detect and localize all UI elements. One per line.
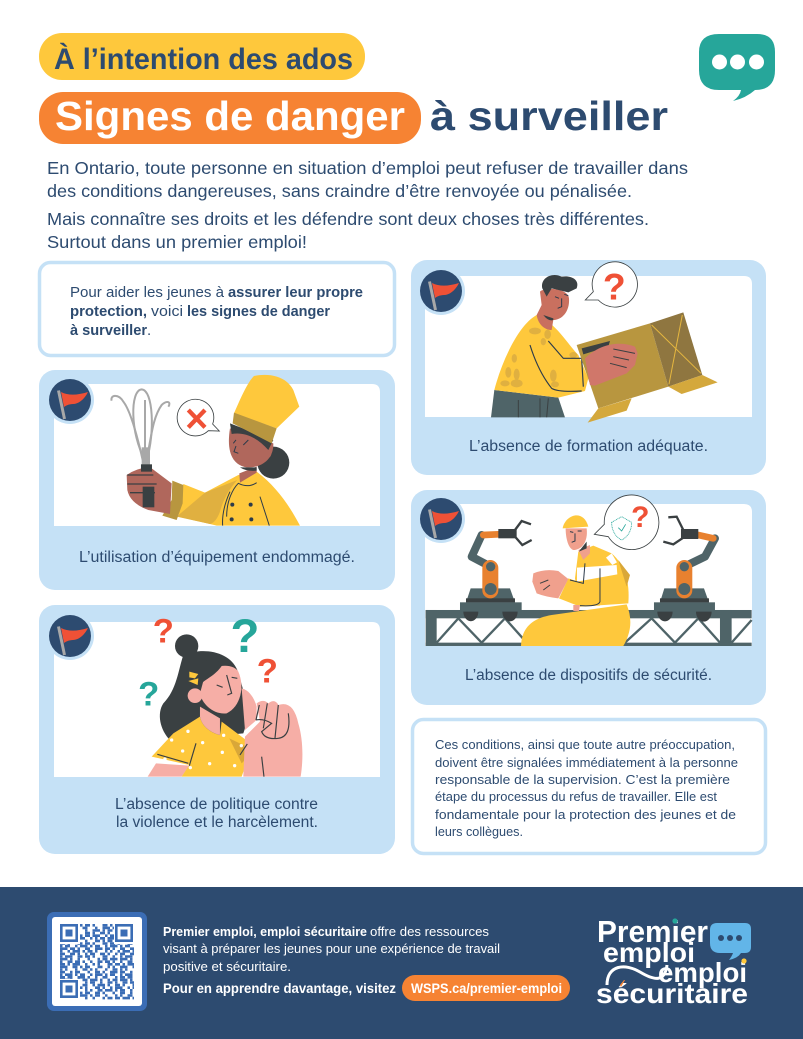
intro text: Mais connaître ses droits et les défendre sont deux choses très différentes. (47, 209, 649, 229)
illustration: girl thinking with question marks: ? (138, 675, 159, 713)
panel: no violence policy (39, 605, 395, 854)
tag heading: À l'intention des ados: À l’intention des ados (54, 42, 353, 76)
panel: reporting note: fondamentale pour la protection des jeunes et de (435, 807, 736, 822)
panel: damaged equipment (39, 370, 395, 590)
tag heading: À l'intention des ados (39, 33, 365, 80)
illustration: worker between robotic arms on a conveyor (426, 495, 752, 646)
intro text: Surtout dans un premier emploi! (47, 232, 307, 252)
logo: Premier emploi, emploi sécuritaire: emploi (658, 957, 747, 988)
title: Signes de danger à surveiller (39, 92, 668, 144)
QR code (47, 912, 147, 1011)
illustration: worker between robotic arms on a conveyor: ? (631, 501, 649, 534)
caption (115, 796, 318, 831)
title: Signes de danger à surveiller: Signes de danger (55, 93, 405, 139)
caption: L’utilisation d’équipement endommagé. (79, 549, 355, 566)
panel: missing safety devices (411, 490, 766, 705)
logo: Premier emploi, emploi sécuritaire: Premier (597, 914, 708, 949)
caption: L’absence de dispositifs de sécurité. (465, 667, 712, 684)
footer text: Premier emploi, emploi sécuritaire (163, 924, 367, 939)
panel: intro callout: . (147, 322, 151, 339)
illustration: girl thinking with question marks (138, 610, 302, 777)
panel: inadequate training (411, 260, 766, 475)
panel: reporting note: étape du processus du refus de travailler. Elle est (435, 789, 717, 804)
panel: reporting note (412, 720, 766, 854)
icon: red flag badge (417, 495, 465, 543)
intro text: des conditions dangereuses, sans craindre d’être renvoyée ou pénalisée. (47, 181, 632, 201)
panel: intro callout: protection, (70, 303, 147, 320)
title: Signes de danger à surveiller: à surveiller (430, 93, 668, 139)
panel: reporting note: doivent être signalées immédiatement à la personne (435, 755, 738, 770)
link pill (402, 975, 570, 1001)
illustration: chef with broken whisk (111, 375, 300, 526)
panel: intro callout: les signes de danger (187, 303, 330, 320)
caption: la violence et le harcèlement. (116, 814, 318, 831)
footer band (0, 887, 803, 1039)
icon: red flag badge (417, 267, 465, 315)
footer text: visant à préparer les jeunes pour une expérience de travail (163, 941, 500, 956)
panel: intro callout: assurer leur propre (228, 284, 363, 301)
intro text (47, 158, 688, 252)
icon: red flag badge (46, 612, 94, 660)
illustration: girl thinking with question marks: ? (257, 653, 278, 691)
icon: red flag badge (46, 376, 94, 424)
panel: intro callout: Pour aider les jeunes à (70, 284, 225, 301)
illustration: girl thinking with question marks: ? (153, 612, 174, 650)
caption: L’absence de politique contre (115, 796, 318, 813)
footer text (163, 924, 500, 996)
footer text: Pour en apprendre davantage, visitez (163, 980, 396, 996)
panel: reporting note: Ces conditions, ainsi que toute autre préoccupation, (435, 737, 735, 752)
illustration: worker holding a box: ? (603, 265, 626, 307)
panel: reporting note: leurs collègues. (435, 824, 523, 839)
caption: L’absence de formation adéquate. (469, 438, 708, 455)
panel: reporting note: responsable de la supervision. C’est la première (435, 772, 730, 787)
logo: Premier emploi, emploi sécuritaire: emploi (603, 937, 695, 968)
logo: Premier emploi, emploi sécuritaire (596, 914, 751, 1009)
panel: intro callout: voici (151, 303, 183, 320)
link pill: WSPS.ca/premier-emploi (411, 980, 562, 996)
footer text: positive et sécuritaire. (163, 959, 291, 974)
icon: teal speech bubble (699, 34, 775, 101)
intro text: En Ontario, toute personne en situation d’emploi peut refuser de travailler dans (47, 158, 688, 178)
illustration: girl thinking with question marks: ? (231, 610, 259, 663)
panel: intro callout (40, 262, 394, 356)
footer text: offre des ressources (370, 924, 489, 939)
illustration: worker holding a box (491, 262, 718, 423)
logo: Premier emploi, emploi sécuritaire: sécuritaire (596, 978, 748, 1009)
panel: intro callout: à surveiller (70, 322, 147, 339)
